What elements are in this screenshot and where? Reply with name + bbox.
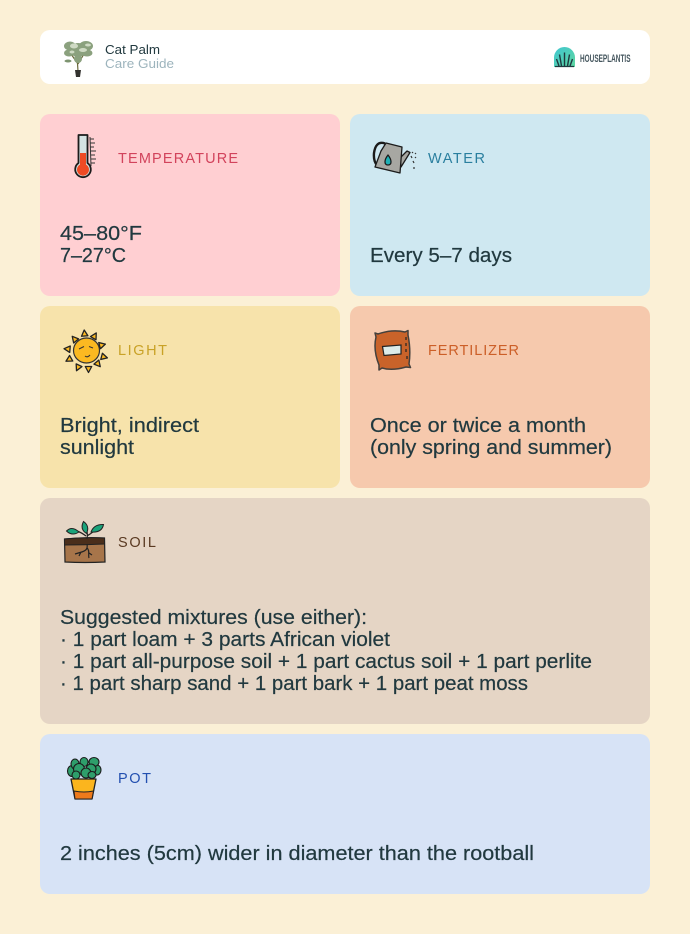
light requirement: [60, 415, 199, 459]
header bar: [40, 30, 650, 84]
plant name: Cat Palm: [105, 42, 160, 57]
icon: seedling in soil: [64, 522, 105, 562]
subtitle: Care Guide: [105, 56, 174, 71]
panel: light: [40, 306, 340, 488]
watering frequency: Every 5–7 days: [370, 245, 512, 267]
logo: Houseplantis: [554, 47, 630, 67]
temperature values: [60, 223, 142, 267]
fertilizing schedule: (only spring and summer): [370, 437, 612, 459]
label: soil: SOIL: [118, 535, 156, 551]
label: pot: POT: [118, 771, 151, 787]
soil mixture list: Suggested mixtures (use either):: [60, 607, 367, 629]
icon: cat palm plant: [64, 41, 93, 77]
icon: sun: [64, 330, 108, 372]
icon: potted plant: [68, 758, 101, 799]
panel: water: [350, 114, 650, 296]
panel: fertilizer: [350, 306, 650, 488]
soil mixture list: · 1 part all-purpose soil + 1 part cactus soil + 1 part perlite: [60, 651, 592, 673]
panel: pot: [40, 734, 650, 894]
icon: watering can: [374, 143, 416, 173]
temperature values: 45–80°F: [60, 223, 142, 245]
label: fertilizer: FERTILIZER: [428, 343, 519, 359]
label: temperature: TEMPERATURE: [118, 151, 238, 167]
soil mixture list: · 1 part sharp sand + 1 part bark + 1 part peat moss: [60, 673, 528, 695]
soil mixture list: · 1 part loam + 3 parts African violet: [60, 629, 390, 651]
logo: Houseplantis: HOUSEPLANTIS: [580, 53, 630, 65]
light requirement: sunlight: [60, 437, 134, 459]
label: water: WATER: [428, 151, 485, 167]
icon: thermometer: [75, 135, 96, 177]
label: light: LIGHT: [118, 343, 167, 359]
fertilizing schedule: [370, 415, 612, 459]
icon: fertilizer bag: [375, 330, 410, 370]
panel: soil: [40, 498, 650, 724]
light requirement: Bright, indirect: [60, 415, 199, 437]
fertilizing schedule: Once or twice a month: [370, 415, 586, 437]
soil mixture list: [60, 607, 592, 695]
panel: temperature: [40, 114, 340, 296]
temperature values: 7–27°C: [60, 245, 126, 267]
pot size: 2 inches (5cm) wider in diameter than the rootball: [60, 843, 534, 865]
